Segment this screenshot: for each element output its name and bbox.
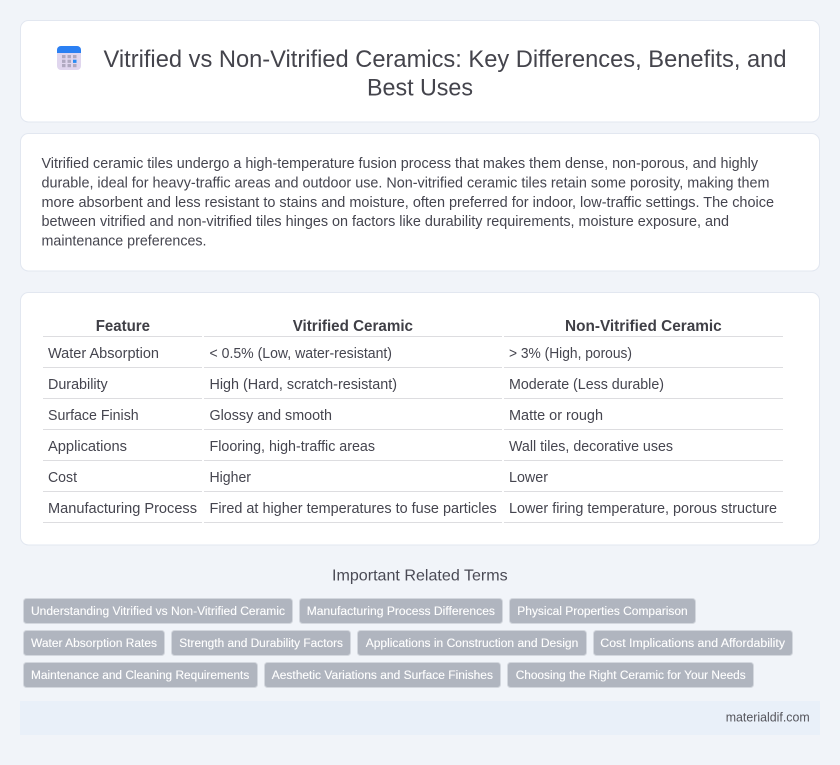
text block: description: Vitrified ceramic tiles undergo a high-temperature fusion process that makes them dense, non-porous, and highly — [42, 156, 759, 172]
row: manufacturing process: Lower firing temperature, porous structure — [509, 501, 777, 517]
row: applications: Flooring, high-traffic areas — [210, 439, 375, 455]
chip — [358, 630, 586, 656]
text block: description: more absorbent and less resistant to stains and moisture, often preferred for indoor, low-traffic settings. The choice — [42, 195, 774, 211]
panel: title card — [20, 20, 820, 122]
row: water absorption: > 3% (High, porous) — [509, 346, 632, 362]
row: cost: Cost — [48, 470, 77, 486]
panel: description — [20, 134, 820, 271]
row: manufacturing process: Manufacturing Process — [48, 501, 197, 517]
chip: Strength and Durability Factors — [179, 636, 343, 650]
chip — [172, 630, 350, 656]
icon: calendar — [57, 46, 81, 70]
related terms chips — [24, 598, 792, 688]
chip: Choosing the Right Ceramic for Your Needs — [516, 668, 746, 682]
row: surface finish: Surface Finish — [48, 408, 139, 424]
row: cost — [48, 470, 548, 486]
chip — [264, 662, 500, 688]
text block: description: durable, ideal for heavy-traffic areas and outdoor use. Non-vitrified ceramic tiles retain some porosity, making them — [42, 175, 770, 191]
chip — [24, 598, 292, 624]
chip: Cost Implications and Affordability — [600, 636, 786, 650]
title: Best Uses — [367, 74, 473, 102]
table header row: Feature — [96, 318, 150, 335]
table header row — [96, 318, 722, 335]
chip: Manufacturing Process Differences — [307, 604, 495, 618]
chip — [508, 662, 754, 688]
panel: comparison table — [20, 292, 820, 545]
footer source: materialdif.com — [726, 711, 810, 725]
chip: Applications in Construction and Design — [366, 636, 578, 650]
table header row: Non-Vitrified Ceramic — [565, 318, 722, 335]
chip — [510, 598, 696, 624]
row: applications: Applications — [48, 439, 127, 455]
heading: important related terms: Important Related Terms — [332, 568, 508, 585]
footer — [20, 701, 820, 735]
text block: description — [42, 156, 774, 250]
title: Vitrified vs Non-Vitrified Ceramics: Key Differences, Benefits, and — [104, 46, 786, 73]
table header row: Vitrified Ceramic — [293, 318, 413, 335]
chip: Maintenance and Cleaning Requirements — [31, 668, 249, 682]
text block: description: between vitrified and non-vitrified tiles hinges on factors like durability requirements, moisture exposure, and — [42, 214, 729, 230]
chip: Physical Properties Comparison — [517, 604, 688, 618]
row: surface finish: Glossy and smooth — [210, 408, 332, 424]
row: cost: Higher — [210, 470, 251, 486]
chip: Aesthetic Variations and Surface Finishes — [272, 668, 493, 682]
row: cost: Lower — [509, 470, 548, 486]
chip — [24, 630, 164, 656]
chip: Understanding Vitrified vs Non-Vitrified Ceramic — [31, 604, 285, 618]
row: surface finish: Matte or rough — [509, 408, 603, 424]
text block: description: maintenance preferences. — [42, 234, 206, 250]
row: water absorption: < 0.5% (Low, water-resistant) — [210, 346, 392, 362]
row: durability: High (Hard, scratch-resistant) — [210, 377, 397, 393]
chip — [24, 662, 258, 688]
row: durability — [48, 377, 664, 393]
row: water absorption — [48, 346, 632, 362]
chip: Water Absorption Rates — [31, 636, 157, 650]
chip — [300, 598, 502, 624]
row: applications — [48, 439, 673, 455]
row: applications: Wall tiles, decorative uses — [509, 439, 673, 455]
chip — [594, 630, 792, 656]
row: manufacturing process: Fired at higher temperatures to fuse particles — [210, 501, 497, 517]
row: manufacturing process — [48, 501, 777, 517]
row: water absorption: Water Absorption — [48, 346, 159, 362]
row: surface finish — [48, 408, 603, 424]
title — [104, 46, 786, 102]
row: durability: Durability — [48, 377, 108, 393]
row: durability: Moderate (Less durable) — [509, 377, 664, 393]
